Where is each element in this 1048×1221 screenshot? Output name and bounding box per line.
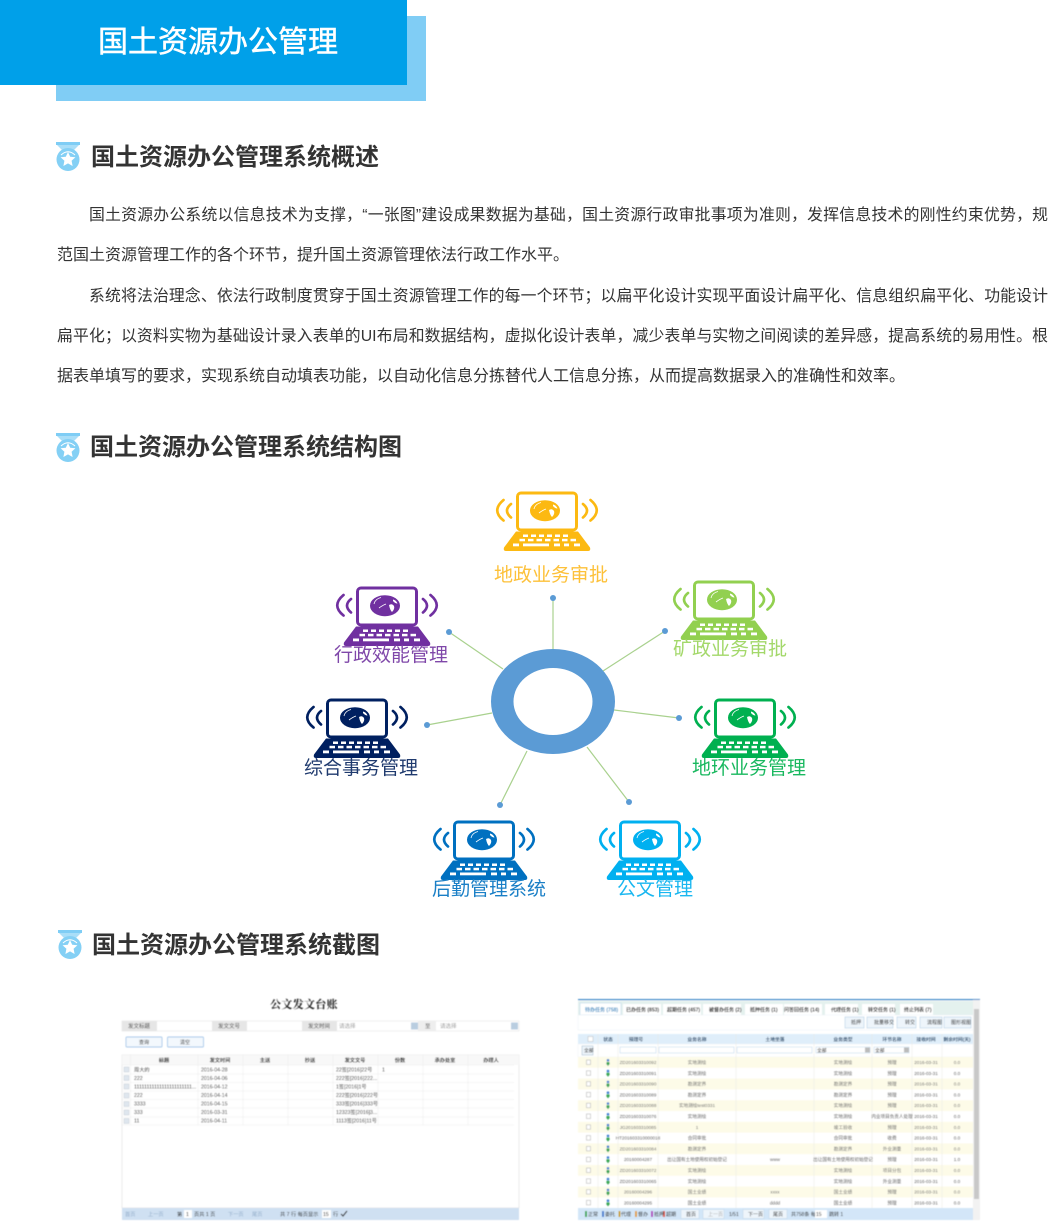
node: documents: 公文管理	[617, 878, 693, 900]
task table rows: 外业测量	[883, 1145, 902, 1152]
task table rows: 实地测绘	[834, 1167, 853, 1174]
task table rows: 2016-03-31	[914, 1146, 938, 1151]
task table footer: 下一页	[748, 1212, 763, 1218]
toolbar: 流程图	[927, 1019, 942, 1026]
task table footer: 跳转 1	[829, 1211, 843, 1218]
paragraph 1: 国土资源办公系统以信息技术为支撑，“一张图”建设成果数据为基础，国土资源行政审批事项为准则，发挥信息技术的刚性约束优势，规	[89, 207, 1048, 224]
paragraph 2: 系统将法治理念、依法行政制度贯穿于国土资源管理工作的每一个环节；以扁平化设计实现平面设计扁平化、信息组织扁平化、功能设计	[89, 288, 1048, 305]
pagination bar: 15	[323, 1212, 329, 1218]
task table rows: 实地测绘	[834, 1102, 853, 1109]
task table filter row: 全部	[875, 1047, 885, 1054]
task table rows: 0.0	[954, 1103, 961, 1108]
pagination bar: 第	[177, 1210, 182, 1218]
pagination bar	[122, 1208, 519, 1220]
task table rows: 国土业绩	[688, 1189, 707, 1196]
pagination bar: 上一页	[148, 1210, 164, 1218]
task table rows: 勘测定界	[834, 1081, 853, 1088]
title: 国土资源办公管理	[98, 26, 338, 59]
task table rows: 0.0	[954, 1190, 961, 1195]
task table rows: 外业测量	[883, 1178, 902, 1185]
search buttons	[126, 1037, 204, 1047]
node: land and environment	[692, 700, 806, 779]
task table rows: ZD201603310065	[620, 1179, 657, 1184]
pagination bar: 尾页	[252, 1211, 262, 1218]
task table rows: 实地测绘	[688, 1059, 707, 1066]
search form: 请选择	[339, 1022, 356, 1030]
task table rows: 预理	[887, 1156, 897, 1163]
search form: 请选择	[440, 1022, 457, 1030]
task table footer: 超期	[666, 1211, 676, 1218]
ledger table: 2016-04-12	[201, 1084, 228, 1090]
task table filter row: 全部	[817, 1047, 827, 1054]
task table rows: HT201603310000018	[616, 1136, 661, 1141]
task table rows: 内业项目负责人处理	[871, 1113, 913, 1120]
search form	[122, 1021, 519, 1031]
task table rows: 0.0	[954, 1200, 961, 1205]
ledger table: 1	[382, 1068, 385, 1074]
section heading: structure	[56, 433, 402, 462]
task table rows: 2016-03-31	[914, 1168, 938, 1173]
task table header: 状态	[603, 1036, 613, 1043]
banner shadow block	[56, 16, 426, 101]
task table rows: xxxx	[770, 1190, 780, 1195]
task table rows: 预理	[887, 1124, 897, 1131]
ledger table: 222签[2016]222...	[336, 1074, 377, 1082]
task table rows: 实地测绘	[688, 1167, 707, 1174]
task table rows: 勘测定界	[834, 1145, 853, 1152]
ledger table: 2016-04-14	[201, 1093, 228, 1099]
task table rows: ZD201603310084	[620, 1146, 657, 1151]
task table rows: 勘测定界	[834, 1091, 853, 1098]
task table footer: 1/51	[729, 1212, 739, 1218]
ledger table: 1113签[2016]11号	[336, 1116, 377, 1124]
section heading: screenshots	[58, 930, 380, 959]
task table rows: 2016-03-31	[914, 1190, 938, 1195]
task table rows: ZD201603310091	[620, 1071, 657, 1076]
task table rows: 国土业绩	[834, 1189, 853, 1196]
task table rows: ZD201603310088	[620, 1103, 657, 1108]
search form: 发文时间	[308, 1022, 330, 1030]
tab bar: 终止列表 (7)	[904, 1006, 932, 1014]
task table rows: 实地测绘	[688, 1070, 707, 1077]
connector dots	[424, 595, 682, 808]
task table footer: 代理	[621, 1211, 631, 1218]
title banner	[0, 0, 426, 101]
task table header: 业务类型	[833, 1036, 853, 1043]
task table rows: 0.0	[954, 1060, 961, 1065]
tab bar: 超期任务 (457)	[667, 1006, 700, 1014]
task table rows: 0.0	[954, 1125, 961, 1130]
task table filter row: 全部	[584, 1047, 594, 1054]
task table rows: 合同审批	[834, 1135, 853, 1142]
task table rows: 2016-03-31	[914, 1200, 938, 1205]
task table header: 环节名称	[882, 1036, 902, 1043]
ledger table: 1签[2016]1号	[336, 1082, 367, 1090]
task table rows: 0.0	[954, 1114, 961, 1119]
task table rows: 收费	[887, 1135, 897, 1142]
ledger table: 222	[134, 1076, 143, 1082]
node: land administration approval	[494, 493, 608, 586]
ledger table: 份数	[395, 1056, 406, 1064]
ledger table: 12323签[2016]3...	[336, 1108, 377, 1116]
tab bar: 被督办任务 (2)	[709, 1006, 742, 1014]
ledger table: 222签[2016]222号	[336, 1091, 378, 1099]
tab bar: 代理任务 (1)	[831, 1006, 859, 1014]
task table rows: 勘测定界	[688, 1091, 707, 1098]
search form: 发文文号	[218, 1022, 241, 1030]
tab bar: 抵押任务 (1)	[750, 1006, 778, 1014]
task table header: 业务名称	[687, 1036, 707, 1043]
ledger table: 333	[134, 1110, 143, 1116]
pagination bar: 页共 1 页	[194, 1210, 215, 1218]
node: documents	[600, 822, 700, 900]
task table rows	[578, 1034, 973, 1208]
ledger table: 2016-04-28	[201, 1068, 228, 1074]
task table rows: 实地测绘	[834, 1070, 853, 1077]
node: mining approval	[673, 582, 787, 660]
task table rows: 国土业绩	[688, 1199, 707, 1206]
task table rows: 2016-03-31	[914, 1071, 938, 1076]
task table rows: 预理	[887, 1059, 897, 1066]
task table rows: 预理	[887, 1189, 897, 1196]
search buttons: 清空	[180, 1039, 190, 1046]
ledger table: 2016-03-31	[201, 1110, 228, 1116]
task table rows: 0.0	[954, 1092, 961, 1097]
task table rows: 实地测绘	[834, 1178, 853, 1185]
task table footer: 正常	[588, 1211, 598, 1218]
task table rows: 实地测绘	[834, 1059, 853, 1066]
ledger table: 发文时间	[210, 1056, 230, 1064]
task table rows: 0.0	[954, 1146, 961, 1151]
ledger table: 333签[2016]333号	[336, 1100, 378, 1108]
task table rows: 0.0	[954, 1082, 961, 1087]
task table rows: 预理	[887, 1070, 897, 1077]
node: general affairs	[304, 700, 418, 779]
section heading: overview	[56, 142, 379, 171]
task table rows: 合同审批	[688, 1135, 707, 1142]
pagination bar: 共 7 行 每页显示	[280, 1210, 318, 1218]
task table rows: ZD201603310092	[620, 1060, 657, 1065]
task table filter row	[578, 1044, 973, 1057]
tab bar	[578, 1001, 973, 1015]
task table rows: www	[770, 1157, 781, 1162]
task table rows: 2016-03-31	[914, 1179, 938, 1184]
task table header: 预理号	[629, 1036, 643, 1043]
node: administrative efficiency	[334, 588, 448, 666]
search buttons: 查询	[139, 1039, 149, 1046]
ledger table: 3333	[134, 1102, 146, 1108]
task table footer: 共758条 每页	[791, 1211, 821, 1218]
banner main block	[0, 0, 407, 85]
ledger table: 222	[134, 1093, 143, 1099]
search form: 发文标题	[128, 1022, 151, 1030]
ledger table: 22签[2016]22号	[336, 1066, 372, 1074]
task table header	[578, 1034, 973, 1044]
task table rows: 0.0	[954, 1071, 961, 1076]
top rule	[578, 999, 980, 1000]
pagination bar: 首页	[125, 1210, 135, 1218]
central ring	[491, 649, 615, 754]
task table rows: 预理	[887, 1091, 897, 1098]
task table rows: 2016-03-31	[914, 1103, 938, 1108]
task table rows: 竣工验收	[834, 1124, 853, 1131]
task table rows: 20160004295	[624, 1200, 652, 1205]
task table rows: 项目分包	[883, 1167, 902, 1174]
task table rows: 实地测绘	[834, 1113, 853, 1120]
task table rows: 2016-03-31	[914, 1060, 938, 1065]
task table rows: 2016-03-31	[914, 1114, 938, 1119]
task table rows: 实地测绘	[688, 1178, 707, 1185]
heading text: 国土资源办公管理系统结构图	[90, 434, 402, 461]
task table rows: 实地测绘	[688, 1113, 707, 1120]
heading text: 国土资源办公管理系统概述	[91, 144, 379, 171]
ledger table: 标题	[159, 1056, 170, 1064]
ledger table: 抄送	[305, 1056, 316, 1064]
task table rows: 出让国有土地使用权初始登记	[813, 1156, 873, 1163]
ledger table: 2016-04-11	[201, 1118, 227, 1124]
ledger table: 办理人	[483, 1056, 500, 1064]
task table rows: 2016-03-31	[914, 1136, 938, 1141]
node: land and environment: 地环业务管理	[692, 757, 806, 779]
task table rows: 20160004296	[624, 1190, 652, 1195]
tab bar: 问答回任务 (14)	[784, 1006, 820, 1014]
ledger table: 11111111111111111111111...	[134, 1084, 196, 1090]
node: logistics	[432, 822, 546, 900]
ledger table: 主送	[260, 1056, 271, 1064]
task table rows: 20160004287	[624, 1157, 652, 1162]
paragraph 2	[57, 287, 1048, 385]
task table rows: dddd	[770, 1200, 781, 1205]
pagination bar: 1	[186, 1212, 189, 1218]
paragraph 2: 扁平化；以资料实物为基础设计录入表单的UI布局和数据结构，虚拟化设计表单，减少表单与实物之间阅读的差异感，提高系统的易用性。根	[57, 328, 1048, 345]
heading text: 国土资源办公管理系统截图	[92, 932, 380, 959]
task table rows: 勘测定界	[688, 1145, 707, 1152]
ledger table: 承办处室	[435, 1056, 455, 1064]
overview text block	[57, 206, 1048, 385]
structure diagram	[304, 492, 806, 900]
task table rows: 0.0	[954, 1136, 961, 1141]
ledger title: 公文发文台账	[270, 997, 338, 1011]
task table rows: 1	[696, 1125, 699, 1130]
node: administrative efficiency: 行政效能管理	[334, 644, 448, 666]
task table rows: 出让国有土地使用权初始登记	[667, 1156, 727, 1163]
task table rows: 国土业绩	[834, 1199, 853, 1206]
task table rows: 2016-03-31	[914, 1125, 938, 1130]
ledger table: 2016-04-06	[201, 1076, 228, 1082]
task table rows: JG201603310085	[620, 1125, 657, 1130]
task table rows: 1.0	[954, 1157, 961, 1162]
task table rows: 预理	[887, 1081, 897, 1088]
task table header: 土地坐落	[765, 1036, 785, 1043]
toolbar: 抵押	[851, 1019, 861, 1026]
pagination bar: 下一页	[228, 1211, 244, 1218]
paragraph 1	[57, 206, 1048, 264]
node: general affairs: 综合事务管理	[304, 757, 418, 779]
task table rows: 0.0	[954, 1168, 961, 1173]
node: land administration approval: 地政业务审批	[494, 564, 608, 586]
node: mining approval: 矿政业务审批	[673, 638, 787, 660]
task table rows: 2016-03-31	[914, 1082, 938, 1087]
icon: medal	[56, 433, 80, 462]
task table footer: 首页	[686, 1211, 696, 1218]
toolbar: 转交	[905, 1019, 915, 1026]
task table rows: 预理	[887, 1102, 897, 1109]
icon: medal	[56, 142, 80, 171]
task table rows: 2016-03-31	[914, 1092, 938, 1097]
task table footer: 上一页	[708, 1211, 723, 1218]
task table header: 接收时间	[916, 1036, 936, 1043]
task table header: 剩余时间(天)	[943, 1036, 971, 1043]
ledger table: 2016-04-15	[201, 1102, 228, 1108]
task table rows: 预理	[887, 1199, 897, 1206]
node: logistics: 后勤管理系统	[432, 878, 546, 900]
toolbar: 图形视图	[951, 1019, 971, 1026]
pagination bar: 行	[333, 1210, 338, 1218]
task table rows: 2016-03-31	[914, 1157, 938, 1162]
screenshot: task list	[577, 998, 980, 1220]
tab bar: 转交任务 (1)	[868, 1006, 896, 1014]
ledger table: 11	[134, 1118, 139, 1124]
scrollbar	[973, 1000, 980, 1220]
toolbar: 批量移交	[874, 1019, 894, 1026]
toolbar	[578, 1015, 973, 1030]
task table rows: ZD201603310090	[620, 1082, 657, 1087]
tab bar: 已办任务 (853)	[626, 1006, 659, 1014]
icon: medal	[58, 930, 82, 959]
task table footer: 尾页	[773, 1212, 783, 1218]
task table rows: ZD201603310089	[620, 1092, 657, 1097]
connector lines	[427, 598, 679, 805]
paragraph 1: 范国土资源管理工作的各个环节，提升国土资源管理依法行政工作水平。	[57, 247, 569, 264]
task table footer: 15	[816, 1212, 822, 1218]
task table footer	[578, 1208, 973, 1220]
task table footer: 督办	[638, 1211, 648, 1218]
paragraph 2: 据表单填写的要求，实现系统自动填表功能，以自动化信息分拣替代人工信息分拣，从而提高数据录入的准确性和效率。	[57, 368, 905, 385]
task table rows: ZD201603310072	[620, 1168, 657, 1173]
ledger table: 发文文号	[345, 1056, 365, 1064]
task table rows: 勘测定界	[688, 1081, 707, 1088]
task table rows: 0.0	[954, 1179, 961, 1184]
task table footer: 抵押	[654, 1211, 664, 1218]
task table rows: 实地测绘test0331	[679, 1102, 715, 1109]
tab bar: 待办任务 (758)	[585, 1006, 618, 1014]
task table rows: ZD201603310076	[620, 1114, 657, 1119]
task table footer: 委托	[605, 1211, 615, 1218]
ledger table: 周大的	[134, 1066, 150, 1074]
ledger table	[122, 1055, 519, 1208]
search form: 至	[425, 1023, 431, 1030]
screenshot: document ledger	[122, 997, 520, 1220]
